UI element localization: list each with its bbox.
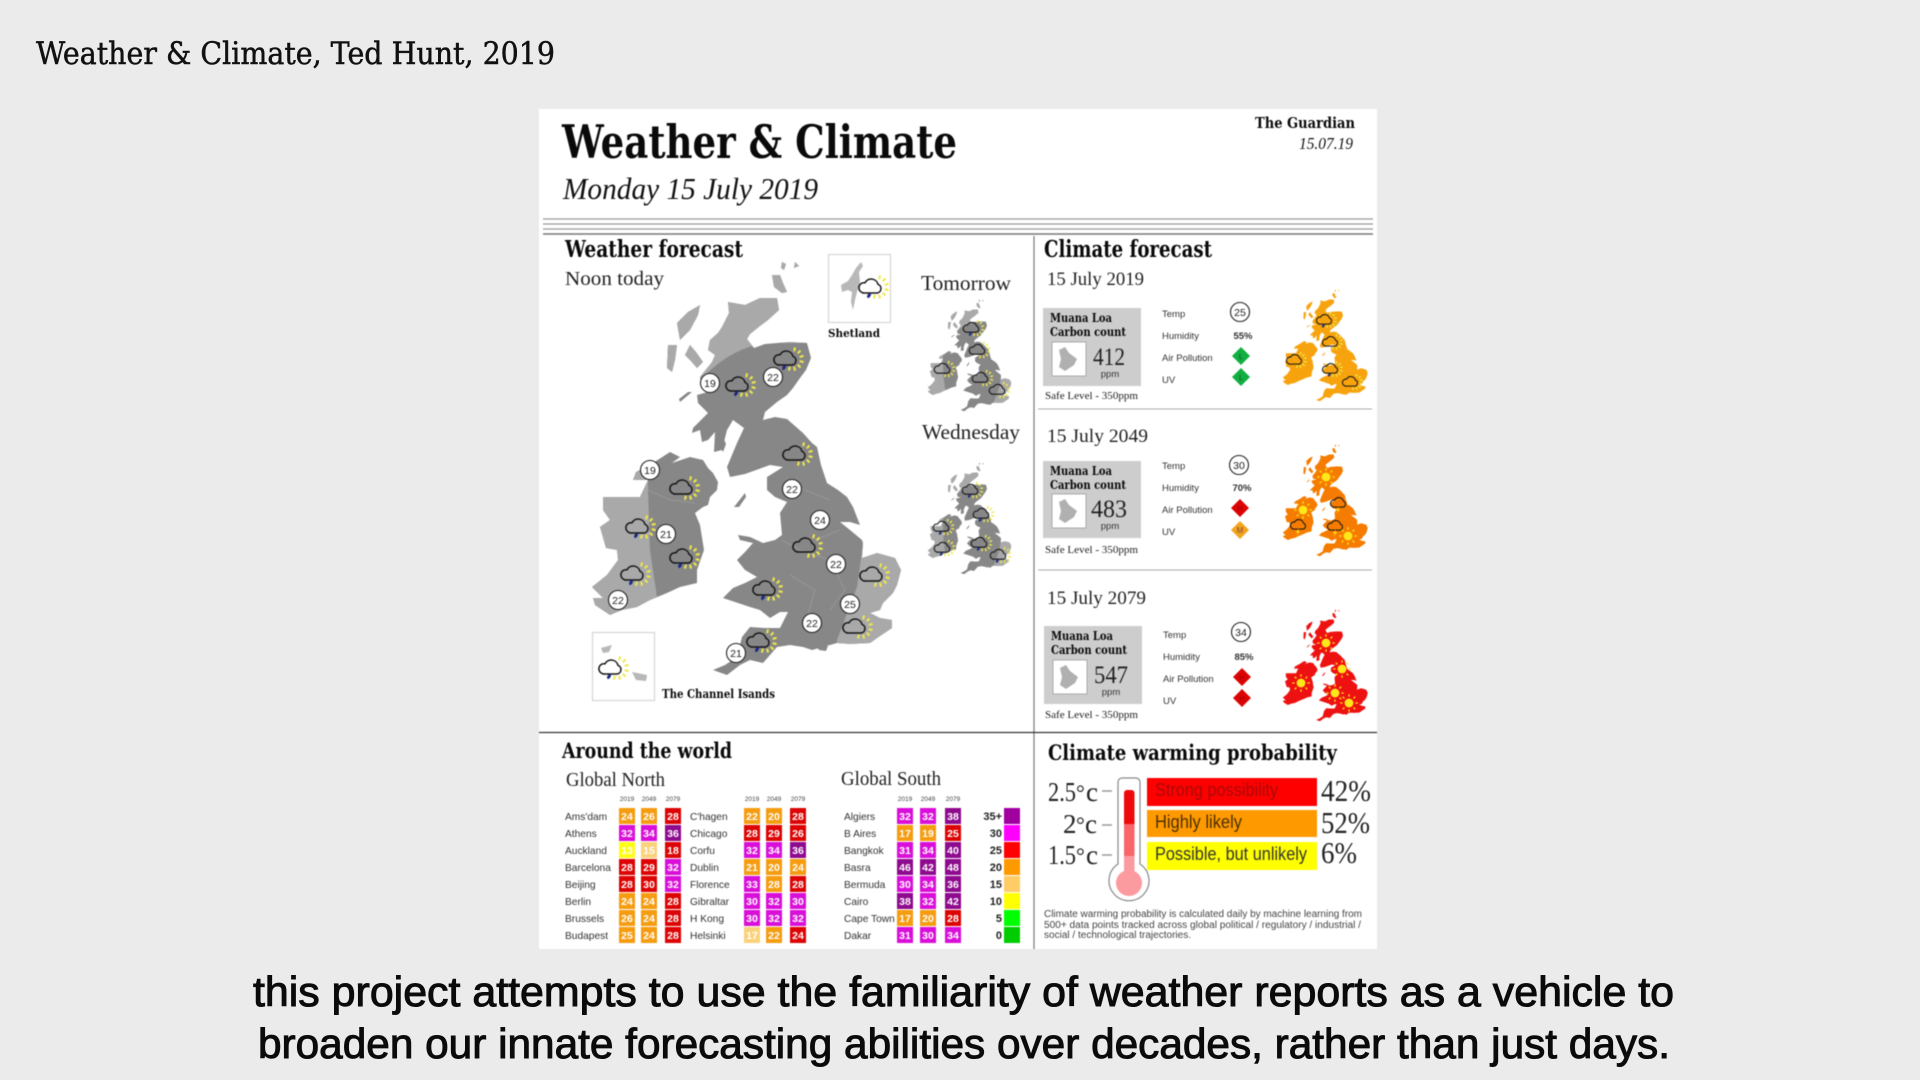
table: global north part 1: 24: [621, 811, 633, 823]
table: global north part 2: 28: [792, 879, 804, 891]
forecast row: 2049: Carbon count: [1050, 478, 1126, 492]
inset: The Channel Islands: [592, 632, 775, 701]
table: global north part 1: Berlin: [565, 897, 591, 908]
forecast row: 2019: 25: [1234, 307, 1246, 319]
forecast row: 2049: Humidity: [1162, 483, 1199, 494]
inset: The Channel Islands: The Channel Isands: [662, 687, 775, 701]
forecast row: 2049: M: [1237, 526, 1244, 535]
table: global north part 2: C'hagen: [690, 812, 728, 823]
weather icons: [621, 347, 890, 653]
table: global north part 2: Helsinki: [690, 931, 726, 942]
thermometer scale labels: °: [1076, 812, 1085, 837]
caption: this project attempts to use the familiarity of weather reports as a vehicle to: [253, 968, 1674, 1015]
table: global north part 1: 2019: [620, 796, 635, 803]
panel: newspaper page: [539, 109, 1377, 949]
heading: climate warming probability: Climate warming probability: [1048, 740, 1338, 765]
thermometer scale labels: [1048, 777, 1112, 870]
table: global south: 46: [899, 862, 911, 874]
panel: weather forecast: [564, 236, 1021, 701]
temperature values: 22: [830, 559, 842, 571]
footnote: Climate warming probability is calculated daily by machine learning from: [1044, 909, 1362, 920]
bar: highly likely: 52%: [1321, 805, 1370, 840]
table: global south: 38: [899, 896, 911, 908]
inset: Shetland: [828, 254, 890, 340]
icon: thermometer: [1109, 778, 1149, 901]
temperature values: 21: [660, 529, 672, 541]
forecast row: 2049: ppm: [1101, 521, 1119, 532]
forecast row: 2019: Air Pollution: [1162, 353, 1213, 364]
table: global north part 2: Dublin: [690, 863, 719, 874]
table: global south: 2049: [921, 796, 936, 803]
footnote: social / technological trajectories.: [1044, 930, 1191, 941]
table: global south: 32: [899, 811, 911, 823]
table: global north part 1: 13: [621, 845, 633, 857]
table: global south: 42: [922, 862, 934, 874]
forecast row: 2019: 55%: [1233, 331, 1253, 342]
table: global south: 38: [947, 811, 959, 823]
table: global south: 48: [947, 862, 959, 874]
legend: temperature scale: 25: [990, 845, 1002, 857]
table: global north part 2: 32: [768, 913, 780, 925]
forecast row: 2019: Humidity: [1162, 331, 1199, 342]
masthead title: Weather & Climate: [561, 115, 957, 169]
map: wednesday: [926, 461, 1014, 576]
map: tomorrow: [926, 298, 1014, 413]
table: global north part 2: 28: [746, 828, 758, 840]
temperature values: 21: [730, 648, 742, 660]
legend: temperature scale: 30: [990, 828, 1002, 840]
table: global north part 1: 29: [643, 862, 655, 874]
forecast row: 2019: 15 July 2019: [1047, 269, 1144, 290]
heading: around the world: Around the world: [561, 738, 732, 763]
table: global north part 2: 32: [792, 913, 804, 925]
forecast row: 2049: Air Pollution: [1162, 505, 1213, 516]
forecast row: 2049: UV: [1162, 527, 1176, 538]
legend: temperature scale: 35+: [983, 811, 1002, 823]
table: global north part 2: 36: [792, 845, 804, 857]
table: global north part 2: 34: [768, 845, 780, 857]
subheading: noon today: Noon today: [565, 268, 664, 290]
table: global north part 1: 26: [621, 913, 633, 925]
table: global north part 2: 20: [768, 862, 780, 874]
table: global north part 1: 24: [643, 930, 655, 942]
table: global south: 20: [922, 913, 934, 925]
bar: possible but unlikely: Possible, but unlikely: [1155, 844, 1307, 864]
forecast row: 2079: Carbon count: [1051, 643, 1127, 657]
forecast row: 2049: Safe Level - 350ppm: [1045, 544, 1138, 556]
temperature badges: [608, 368, 860, 662]
forecast row: 2019: UV: [1162, 375, 1176, 386]
table: global south: 34: [922, 845, 934, 857]
table: global south: 30: [899, 879, 911, 891]
table: global north part 2: 32: [768, 896, 780, 908]
table: global south: 40: [947, 845, 959, 857]
table: global south: 42: [947, 896, 959, 908]
thermometer scale labels: 1.5: [1048, 840, 1076, 870]
table: global south: 32: [922, 811, 934, 823]
panel: around the world: [561, 738, 1020, 943]
table: global north part 2: 26: [792, 828, 804, 840]
table: global north part 2: 30: [792, 896, 804, 908]
table: global north part 2: 20: [768, 811, 780, 823]
table: global north part 1: 28: [621, 862, 633, 874]
panel: climate warming probability: [1044, 740, 1371, 941]
table: global south: 28: [947, 913, 959, 925]
temperature values: 19: [644, 465, 656, 477]
table: global north part 1: 24: [643, 913, 655, 925]
video title: Weather & Climate, Ted Hunt, 2019: [36, 36, 555, 72]
forecast row: 2019: [1043, 269, 1368, 402]
table: global north part 1: Budapest: [565, 931, 608, 942]
table: global north part 2: Corfu: [690, 846, 715, 857]
table: global north part 2: 29: [768, 828, 780, 840]
forecast row: 2079: Temp: [1163, 630, 1186, 641]
temperature values: 22: [806, 618, 818, 630]
forecast row: 2079: 547: [1094, 662, 1128, 689]
footnote: [1044, 909, 1362, 941]
table: global south: B Aires: [844, 829, 876, 840]
bar: highly likely: Highly likely: [1155, 812, 1242, 832]
table: global north part 1: 24: [643, 896, 655, 908]
table: global south: [844, 796, 961, 943]
forecast row: 2079: [1044, 588, 1368, 721]
table: global south: 36: [947, 879, 959, 891]
temperature values: 22: [612, 595, 624, 607]
bar: highly likely: [1147, 805, 1370, 840]
table: global north part 2: 2019: [745, 796, 760, 803]
table: global south: 19: [922, 828, 934, 840]
legend: temperature scale: 10: [990, 896, 1002, 908]
table: global north part 1: Ams'dam: [565, 812, 607, 823]
table: global north part 1: 34: [643, 828, 655, 840]
table: global north part 1: Athens: [565, 829, 597, 840]
table: global north part 1: 32: [667, 879, 679, 891]
panel: climate forecast: [1038, 236, 1372, 721]
legend: temperature scale: 5: [996, 913, 1002, 925]
table: global south: 31: [899, 930, 911, 942]
forecast row: 2079: 15 July 2079: [1047, 588, 1146, 609]
caption: broaden our innate forecasting abilities over decades, rather than just days.: [258, 1020, 1670, 1067]
temperature values: 22: [786, 484, 798, 496]
forecast row: 2019: Safe Level - 350ppm: [1045, 390, 1138, 402]
table: global north part 2: 2049: [767, 796, 782, 803]
legend: temperature scale: 15: [990, 879, 1002, 891]
thermometer scale labels: c: [1086, 840, 1098, 870]
forecast row: 2079: H: [1239, 696, 1245, 703]
bar: strong possibility: 42%: [1321, 773, 1371, 808]
forecast row: 2019: 412: [1093, 344, 1125, 371]
thermometer scale labels: c: [1085, 809, 1097, 839]
legend: temperature scale: [983, 808, 1020, 943]
table: global north part 1: 28: [667, 896, 679, 908]
table: global south: 34: [947, 930, 959, 942]
heading: climate forecast: Climate forecast: [1044, 236, 1212, 263]
table: global north part 1: 32: [667, 862, 679, 874]
table: global north part 2: 17: [746, 930, 758, 942]
table: global north part 1: Brussels: [565, 914, 604, 925]
table: global south: 32: [922, 896, 934, 908]
table: global south: Cape Town: [844, 914, 895, 925]
caption: [253, 968, 1674, 1067]
table: global north part 2: 33: [746, 879, 758, 891]
thermometer scale labels: 2.5: [1048, 777, 1076, 807]
publication name: The Guardian: [1255, 114, 1355, 132]
table: global north part 1: 18: [667, 845, 679, 857]
temperature values: 22: [767, 372, 779, 384]
table: global north part 1: [565, 796, 681, 943]
table: global north part 1: Beijing: [565, 880, 596, 891]
table: global south: 17: [899, 913, 911, 925]
subheading: global north: Global North: [566, 769, 665, 791]
bar: possible but unlikely: 6%: [1321, 835, 1357, 870]
thermometer scale labels: °: [1076, 843, 1085, 868]
table: global north part 1: 30: [643, 879, 655, 891]
table: global north part 2: 32: [746, 845, 758, 857]
table: global north part 1: 15: [643, 845, 655, 857]
label: wednesday: Wednesday: [922, 420, 1021, 444]
forecast row: 2049: H: [1237, 506, 1243, 513]
table: global north part 2: 2079: [791, 796, 806, 803]
table: global north part 2: 21: [746, 862, 758, 874]
table: global south: Basra: [844, 863, 871, 874]
footnote: 500+ data points tracked across global political / regulatory / industrial /: [1044, 920, 1361, 931]
heading: weather forecast: Weather forecast: [564, 236, 743, 263]
table: global south: Bermuda: [844, 880, 886, 891]
temperature values: [612, 372, 856, 660]
table: global north part 2: 22: [768, 930, 780, 942]
table: global north part 1: Barcelona: [565, 863, 611, 874]
table: global north part 1: 28: [621, 879, 633, 891]
table: global north part 1: 28: [667, 913, 679, 925]
forecast row: 2079: H: [1239, 675, 1245, 682]
forecast row: 2049: 483: [1091, 496, 1127, 523]
forecast row: 2019: Muana Loa: [1050, 311, 1112, 325]
thermometer scale labels: °: [1076, 780, 1085, 805]
forecast row: 2019: Temp: [1162, 309, 1185, 320]
forecast row: 2049: Muana Loa: [1050, 464, 1112, 478]
forecast row: 2019: ppm: [1101, 369, 1119, 380]
bar: possible but unlikely: [1147, 835, 1357, 870]
table: global north part 2: Chicago: [690, 829, 728, 840]
table: global north part 2: 24: [792, 930, 804, 942]
table: global north part 1: 2079: [666, 796, 681, 803]
legend: temperature scale: 0: [996, 930, 1002, 942]
forecast row: 2049: Temp: [1162, 461, 1185, 472]
table: global south: 2079: [946, 796, 961, 803]
table: global north part 2: Gibraltar: [690, 897, 730, 908]
masthead date: Monday 15 July 2019: [562, 171, 818, 206]
table: global north part 1: 24: [621, 896, 633, 908]
forecast row: 2049: 70%: [1232, 483, 1252, 494]
label: tomorrow: Tomorrow: [921, 271, 1012, 295]
forecast row: 2079: 85%: [1234, 652, 1254, 663]
bar: strong possibility: [1147, 773, 1371, 808]
subheading: global south: Global South: [841, 768, 941, 790]
map: UK and Ireland noon today: [585, 255, 910, 680]
forecast row: 2019: L: [1239, 354, 1243, 361]
forecast row: 2079: Air Pollution: [1163, 674, 1214, 685]
table: global north part 1: 25: [621, 930, 633, 942]
table: global north part 2: 28: [768, 879, 780, 891]
forecast row: 2019: L: [1239, 375, 1243, 382]
table: global south: Cairo: [844, 897, 869, 908]
table: global south: 31: [899, 845, 911, 857]
table: global north part 2: 22: [746, 811, 758, 823]
temperature values: 24: [814, 515, 826, 527]
table: global south: 34: [922, 879, 934, 891]
table: global north part 2: 30: [746, 896, 758, 908]
table: global north part 1: 28: [667, 930, 679, 942]
table: global south: 30: [922, 930, 934, 942]
table: global north part 2: H Kong: [690, 914, 724, 925]
table: global south: Algiers: [844, 812, 875, 823]
forecast row: 2079: Safe Level - 350ppm: [1045, 709, 1138, 721]
legend: temperature scale: 20: [990, 862, 1002, 874]
table: global south: 2019: [898, 796, 913, 803]
table: global south: 25: [947, 828, 959, 840]
table: global north part 1: 32: [621, 828, 633, 840]
table: global north part 1: Auckland: [565, 846, 607, 857]
thermometer scale labels: 2: [1063, 809, 1076, 839]
table: global north part 1: 28: [667, 811, 679, 823]
thermometer scale labels: c: [1086, 777, 1098, 807]
publication date: 15.07.19: [1299, 134, 1353, 153]
inset: Shetland: Shetland: [828, 326, 880, 340]
forecast row: 2079: UV: [1163, 696, 1177, 707]
bar: strong possibility: Strong possibility: [1155, 780, 1278, 800]
forecast row: 2019: Carbon count: [1050, 325, 1126, 339]
forecast row: 2079: ppm: [1102, 687, 1120, 698]
temperature values: 25: [844, 599, 856, 611]
forecast row: 2079: Humidity: [1163, 652, 1200, 663]
table: global south: 17: [899, 828, 911, 840]
forecast row: 2049: 15 July 2049: [1047, 426, 1148, 447]
temperature values: 19: [704, 378, 716, 390]
forecast row: 2079: Muana Loa: [1051, 629, 1113, 643]
table: global north part 1: 2049: [642, 796, 657, 803]
table: global south: Bangkok: [844, 846, 885, 857]
table: global north part 2: 30: [746, 913, 758, 925]
table: global north part 2: [690, 796, 806, 943]
table: global north part 2: 28: [792, 811, 804, 823]
table: global north part 1: 26: [643, 811, 655, 823]
table: global north part 2: 24: [792, 862, 804, 874]
table: global south: Dakar: [844, 931, 872, 942]
forecast row: 2079: 34: [1235, 627, 1247, 639]
forecast row: 2049: 30: [1233, 460, 1245, 472]
table: global north part 1: 36: [667, 828, 679, 840]
table: global north part 2: Florence: [690, 880, 730, 891]
forecast row: 2049: [1043, 426, 1368, 556]
